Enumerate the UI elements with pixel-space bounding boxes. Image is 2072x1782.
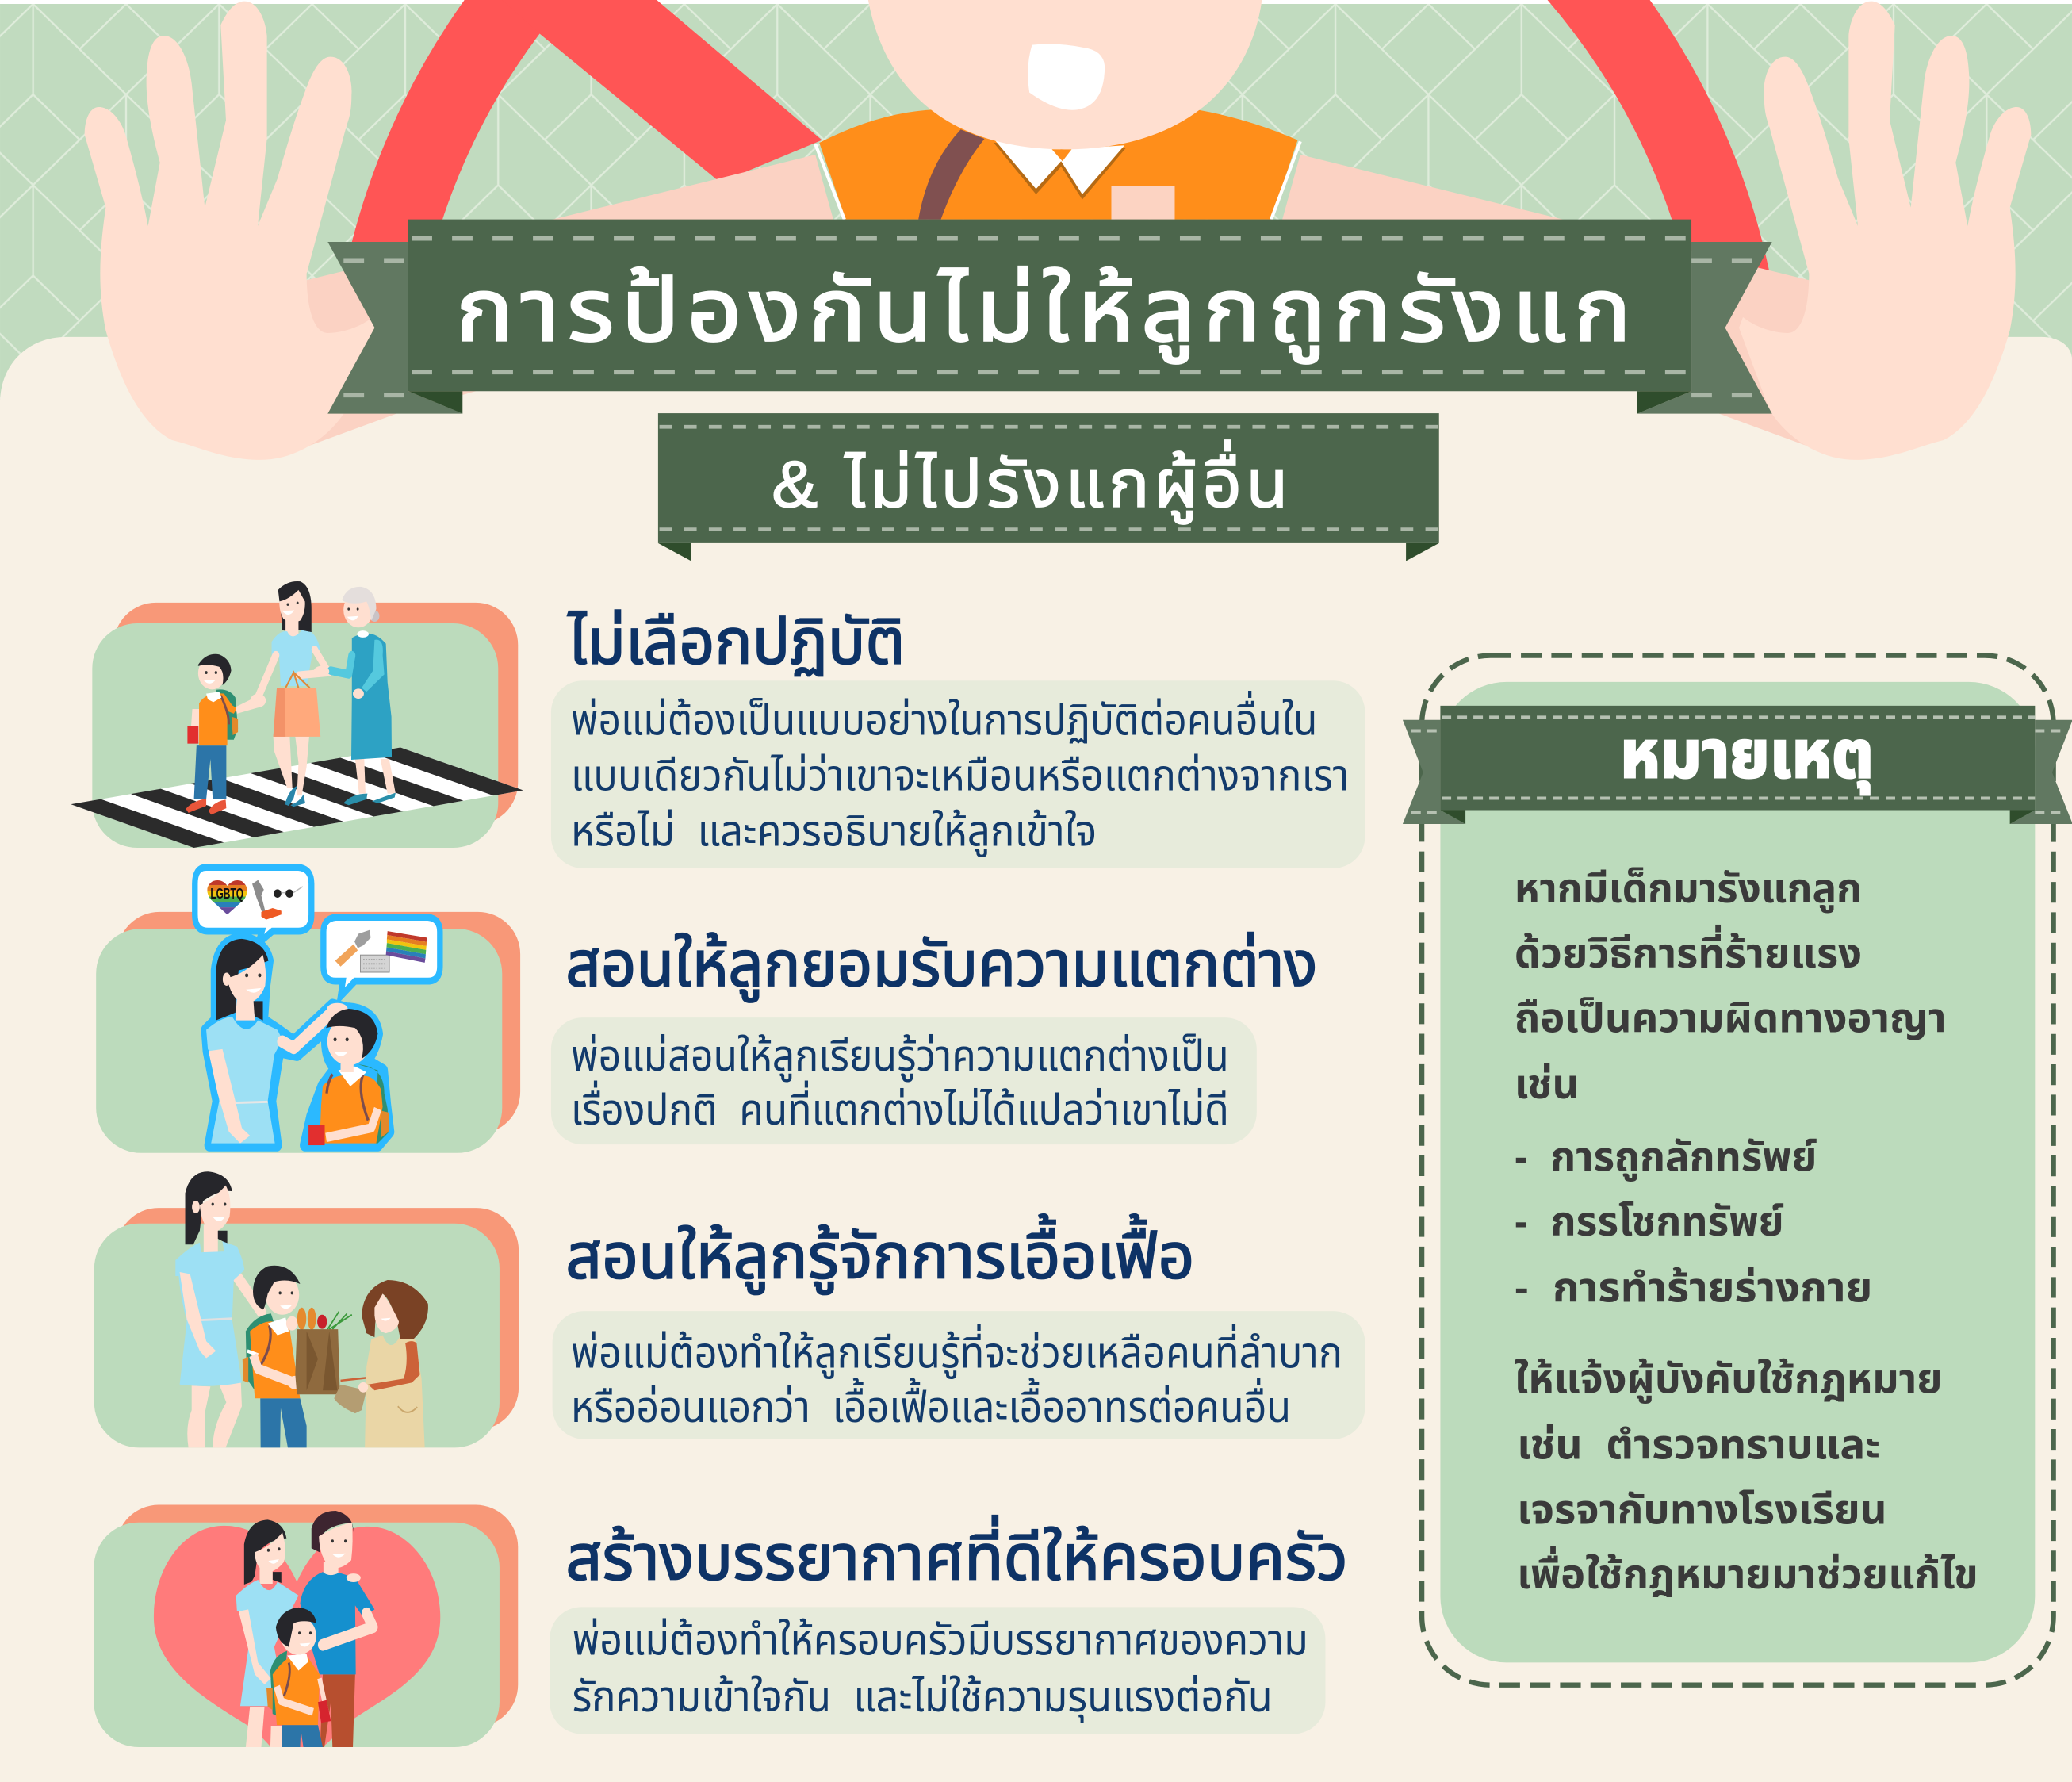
speech bubble: differences (195, 868, 312, 944)
mother (175, 1171, 261, 1447)
zebra crossing (71, 748, 523, 848)
text box 4 (550, 1607, 1325, 1734)
panel: teach generosity illustration (94, 1171, 519, 1447)
icon: prosthetic leg (252, 880, 282, 920)
mother and child with blue outline (206, 939, 389, 1145)
heart (154, 1526, 440, 1747)
note intro text: ด้วยวิธีการที่ร้ายแรง (1515, 925, 1862, 976)
text box 2: เรื่องปกติ คนที่แตกต่างไม่ได้แปลว่าเขาไม่ดี (571, 1080, 1229, 1134)
panel: lead by example illustration (71, 581, 523, 848)
text box 1: แบบเดียวกันไม่ว่าเขาจะเหมือนหรือแตกต่างจากเรา (571, 751, 1349, 800)
mother (258, 581, 328, 807)
right stop hand (1739, 2, 2031, 460)
note action text: เจรจากับทางโรงเรียน (1517, 1486, 1887, 1532)
elderly woman (334, 1280, 428, 1447)
icon: LGBTQ rainbow heart: LGBTQ (210, 886, 243, 902)
header patterned background (0, 0, 2072, 400)
note intro text: ถือเป็นความผิดทางอาญา (1515, 994, 1947, 1040)
heading 3: สอนให้ลูกรู้จักการเอื้อเฟื้อ (565, 1213, 1194, 1294)
icon: rainbow flag (386, 931, 427, 963)
grandmother (314, 587, 396, 805)
arms (307, 155, 1809, 446)
text box 1 (551, 680, 1365, 868)
note action text: ให้แจ้งผู้บังคับใช้กฎหมาย (1515, 1355, 1943, 1404)
text box 4: พ่อแม่ต้องทำให้ครอบครัวมีบรรยากาศของความ (573, 1615, 1308, 1664)
shirt collar (994, 139, 1126, 200)
panel: teach acceptance illustration (96, 868, 520, 1153)
heading 2: สอนให้ลูกยอมรับความแตกต่าง (565, 929, 1317, 1002)
icon: dark glasses (274, 887, 303, 898)
note list: - กรรโชกทรัพย์ (1515, 1198, 1784, 1244)
note ribbon (1403, 706, 2072, 824)
text box 2 (551, 1017, 1257, 1144)
dashed border (1422, 656, 2054, 1685)
bag strap (918, 129, 985, 220)
icon: robotic arm (335, 930, 370, 967)
mother (206, 939, 347, 1144)
text box 4: รักความเข้าใจกัน และไม่ใช้ความรุนแรงต่อกัน (573, 1672, 1273, 1723)
father (300, 1511, 374, 1747)
subtitle ribbon (658, 413, 1439, 561)
text box 3 (553, 1311, 1365, 1439)
presenter figure (307, 0, 1809, 446)
boy (266, 1608, 331, 1747)
note intro text: เช่น (1515, 1061, 1579, 1107)
shirt name tag (1111, 186, 1174, 220)
note intro text (1515, 865, 1947, 1107)
boy (308, 1009, 389, 1145)
mother (236, 1519, 298, 1747)
heading 4: สร้างบรรยากาศที่ดีให้ครอบครัว (565, 1515, 1348, 1592)
note list: - การถูกลักทรัพย์ (1515, 1133, 1817, 1182)
main title ribbon (327, 220, 1772, 414)
panel: note (1403, 656, 2072, 1685)
red prohibition sign (370, 0, 1745, 1111)
subtitle: & ไม่ไปรังแกผู้อื่น (772, 439, 1293, 524)
boy (186, 654, 266, 814)
icon: braille book (360, 955, 389, 972)
text box 1: พ่อแม่ต้องเป็นแบบอย่างในการปฏิบัติต่อคนอื่นใน (571, 691, 1317, 745)
open mouth (1028, 44, 1105, 110)
speech bubble: acceptance (324, 918, 440, 997)
note action text: เพื่อใช้กฎหมายมาช่วยแก้ไข (1517, 1546, 1978, 1597)
boy (243, 1266, 307, 1447)
text box 3: หรืออ่อนแอกว่า เอื้อเฟื้อและเอื้ออาทรต่อคนอื่น (571, 1378, 1291, 1431)
text box 3: พ่อแม่ต้องทำให้ลูกเรียนรู้ที่จะช่วยเหลือคนที่ลำบาก (571, 1324, 1342, 1380)
shopping bag (274, 673, 320, 737)
panel: family atmosphere illustration (94, 1505, 518, 1747)
orange shirt (819, 109, 1297, 220)
text box 1: หรือไม่ และควรอธิบายให้ลูกเข้าใจ (571, 807, 1097, 858)
left stop hand (85, 2, 377, 460)
note list (1515, 1133, 1872, 1310)
green card (1440, 682, 2035, 1662)
note action text (1515, 1355, 1978, 1597)
text box 2: พ่อแม่สอนให้ลูกเรียนรู้ว่าความแตกต่างเป็น (571, 1031, 1229, 1083)
note list: - การทำร้ายร่างกาย (1515, 1264, 1872, 1310)
family crossing the road (186, 581, 396, 814)
heading 1: ไม่เลือกปฏิบัติ (567, 607, 906, 677)
grocery bag (295, 1308, 352, 1394)
note action text: เช่น ตำรวจทราบและ (1517, 1422, 1880, 1468)
note title: หมายเหตุ (1620, 718, 1874, 795)
face chin (868, 0, 1262, 149)
note intro text: หากมีเด็กมารังแกลูก (1515, 865, 1862, 914)
icon: LGBTQ rainbow heart (207, 880, 247, 915)
main title: การป้องกันไม่ให้ลูกถูกรังแก (456, 262, 1638, 363)
